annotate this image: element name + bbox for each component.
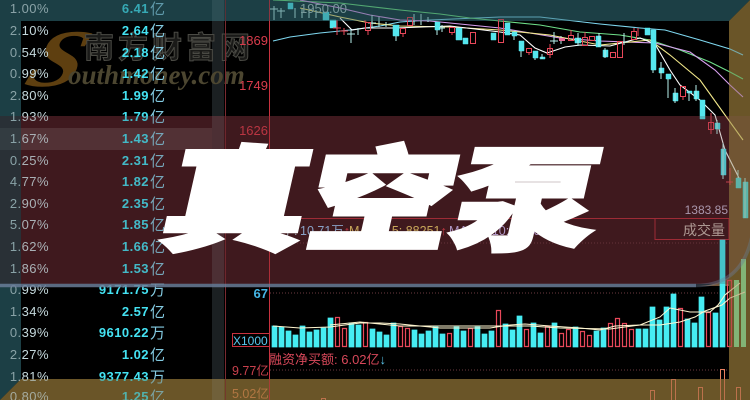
low price label: 1383.85 bbox=[685, 203, 728, 217]
unit column: 亿 bbox=[150, 347, 165, 364]
amount column: 1.43 bbox=[122, 131, 149, 146]
price moving average lines bbox=[273, 0, 743, 180]
price axis labels bbox=[239, 33, 268, 138]
volume legend: MAVOL10: 90800 bbox=[449, 224, 547, 238]
cyan candles bbox=[288, 3, 748, 218]
volume legend: ↑ bbox=[440, 224, 447, 238]
percent column: 4.77% bbox=[10, 174, 49, 189]
amount column: 9610.22 bbox=[99, 325, 149, 340]
unit column: 亿 bbox=[150, 1, 165, 18]
unit column: 万 bbox=[150, 325, 165, 342]
percent column: 0.99% bbox=[10, 282, 49, 297]
amount column: 2.35 bbox=[122, 196, 149, 211]
unit column: 万 bbox=[150, 369, 165, 386]
margin scale labels: 9.77亿 bbox=[232, 363, 269, 378]
volume legend: 10.71万 bbox=[300, 224, 344, 238]
amount column: 6.41 bbox=[122, 1, 149, 16]
amount column: 2.57 bbox=[122, 304, 149, 319]
percent column: 1.81% bbox=[10, 369, 49, 384]
dotted gridlines bbox=[270, 243, 729, 370]
pink small candle bbox=[559, 38, 565, 41]
unit column: 亿 bbox=[150, 304, 165, 321]
unit column: 亿 bbox=[150, 131, 165, 148]
unit column: 亿 bbox=[150, 261, 165, 278]
unit column: 亿 bbox=[150, 153, 165, 170]
percent column: 2.10% bbox=[10, 23, 49, 38]
volume scale labels: 67 bbox=[254, 286, 268, 301]
percent column: 1.86% bbox=[10, 261, 49, 276]
percent column: 2.80% bbox=[10, 88, 49, 103]
volume legend: 总手: bbox=[269, 224, 301, 238]
percent column: 1.34% bbox=[10, 304, 49, 319]
percent column: 2.27% bbox=[10, 347, 49, 362]
green volume bars bbox=[734, 259, 746, 347]
percent column: 1.00% bbox=[10, 1, 49, 16]
percent column: 5.07% bbox=[10, 217, 49, 232]
percent column: 1.93% bbox=[10, 109, 49, 124]
unit column: 万 bbox=[150, 282, 165, 299]
red candles bbox=[333, 18, 733, 185]
volume scale labels: X1000 bbox=[233, 334, 268, 348]
amount column: 1.99 bbox=[122, 88, 149, 103]
amount column: 9377.43 bbox=[99, 369, 149, 384]
amount column: 1.42 bbox=[122, 66, 149, 81]
chart price tag: 1950.00 bbox=[300, 1, 347, 16]
amount column: 2.64 bbox=[122, 23, 149, 38]
cyan volume bars bbox=[272, 240, 725, 347]
volume legend: ↑ bbox=[344, 224, 350, 238]
price axis labels: 1869 bbox=[239, 33, 268, 48]
amount column: 1.02 bbox=[122, 347, 149, 362]
percent column: 1.62% bbox=[10, 239, 49, 254]
percent column: 0.39% bbox=[10, 325, 49, 340]
candlestick price chart bbox=[270, 0, 748, 218]
candle wicks bbox=[270, 6, 745, 218]
title: 真空泵 bbox=[149, 110, 621, 274]
amount column: 1.79 bbox=[122, 109, 149, 124]
amount column: 2.18 bbox=[122, 45, 149, 60]
amount column bbox=[99, 1, 149, 400]
red volume bars bbox=[336, 280, 732, 346]
watermark Chinese name: 南方财富网 bbox=[84, 32, 254, 65]
margin bars bbox=[322, 370, 740, 400]
band outline bbox=[0, 236, 750, 286]
unit column: 亿 bbox=[150, 109, 165, 126]
percent column bbox=[10, 1, 49, 400]
amount column: 2.31 bbox=[122, 153, 149, 168]
watermark logo bbox=[15, 14, 254, 105]
price axis bbox=[225, 0, 728, 400]
percent column: 1.67% bbox=[10, 131, 49, 146]
margin chart bbox=[232, 352, 740, 400]
percent column: 0.99% bbox=[10, 66, 49, 81]
data table bbox=[10, 1, 165, 400]
volume average lines bbox=[273, 283, 745, 330]
watermark domain: outhmoney.com bbox=[68, 60, 245, 90]
percent column: 0.54% bbox=[10, 45, 49, 60]
price axis labels: 1626 bbox=[239, 123, 268, 138]
unit column: 亿 bbox=[150, 88, 165, 105]
unit column: 亿 bbox=[150, 174, 165, 191]
amount column: 1.82 bbox=[122, 174, 149, 189]
unit column: 亿 bbox=[150, 196, 165, 213]
unit column: 亿 bbox=[150, 45, 165, 62]
amount column: 1.66 bbox=[122, 239, 149, 254]
amount column: 1.85 bbox=[122, 217, 149, 232]
margin scale labels bbox=[232, 363, 269, 400]
volume legend: MAVOL5: 88251 bbox=[349, 224, 441, 238]
unit column: 亿 bbox=[150, 239, 165, 256]
volume bar chart bbox=[270, 240, 746, 370]
unit column: 亿 bbox=[150, 217, 165, 234]
amount column: 9171.75 bbox=[99, 282, 149, 297]
horizontal divider and volume header box bbox=[269, 218, 729, 240]
percent column: 2.90% bbox=[10, 196, 49, 211]
unit column: 亿 bbox=[150, 23, 165, 40]
percent column: 0.25% bbox=[10, 153, 49, 168]
volume scale labels bbox=[232, 286, 270, 348]
amount column: 1.53 bbox=[122, 261, 149, 276]
price axis labels: 1749 bbox=[239, 78, 268, 93]
unit column bbox=[150, 1, 165, 400]
volume header label: 成交量 bbox=[683, 222, 725, 238]
margin chart heading: 融资净买额: 6.02亿↓ bbox=[269, 352, 386, 367]
unit column: 亿 bbox=[150, 66, 165, 83]
watermark swoosh S: S bbox=[15, 14, 104, 105]
